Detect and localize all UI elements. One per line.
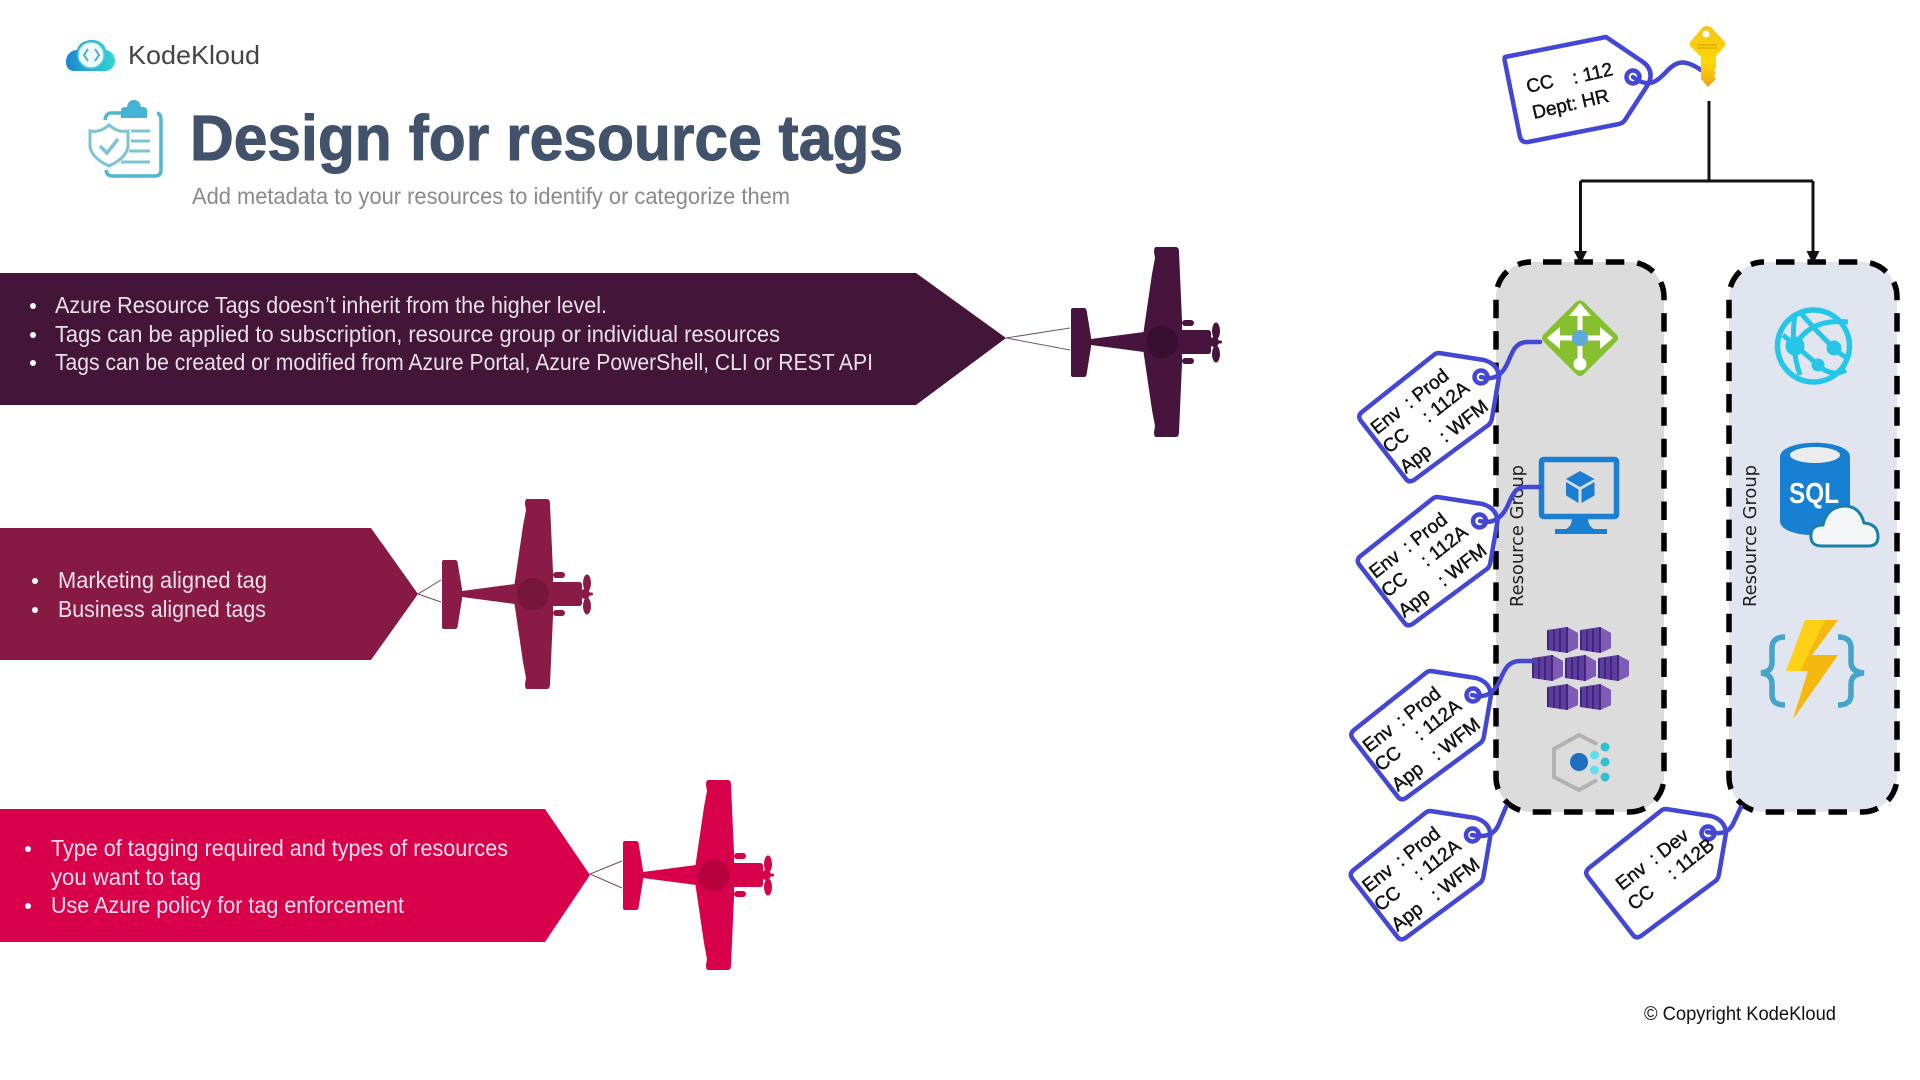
icon: plane 2 towing banner: [418, 499, 593, 689]
tag: load balancer: CC: [1379, 424, 1414, 458]
panel: banner 1 inheritance: [0, 273, 1006, 405]
title: Design for resource tags: [190, 102, 903, 174]
tag: resource group right: : Dev: [1645, 825, 1694, 869]
icon: SQL database: SQL: [1789, 478, 1839, 510]
tag: resource group right: [1586, 807, 1741, 937]
tag: virtual machine: App: [1395, 585, 1434, 622]
icon: hexagon service: [1554, 735, 1610, 790]
banner text: Use Azure policy for tag enforcement: [51, 892, 405, 918]
tag: load balancer: App: [1396, 441, 1436, 478]
arrow: key tag inherits to groups: [1574, 101, 1820, 264]
banner text: [25, 835, 508, 918]
tag: kubernetes: : 112A: [1411, 695, 1466, 745]
panel: banner 3 enforcement: [0, 809, 590, 942]
banner text: Tags can be applied to subscription, resource group or individual resources: [55, 321, 780, 347]
tag: load balancer: [1359, 342, 1540, 481]
tag: kubernetes: [1351, 661, 1532, 799]
banner text: [30, 292, 873, 375]
banner text: Azure Resource Tags doesn’t inherit from the higher level.: [55, 292, 607, 318]
brand name: KodeKloud: [128, 40, 260, 70]
tag: virtual machine: : Prod: [1399, 509, 1452, 557]
icon: function app: [1761, 620, 1864, 719]
tag: kubernetes: : WFM: [1428, 714, 1485, 765]
banner text: Marketing aligned tag: [58, 567, 267, 593]
tag: resource group left: Env: [1359, 860, 1398, 897]
icon: cloud logo: [66, 40, 115, 71]
group label: Resource Group: [1507, 465, 1528, 607]
tag: resource group left: App: [1388, 899, 1427, 936]
panel: banner 2 aligned tags: [0, 528, 418, 660]
icon: load balancer: [1542, 300, 1618, 376]
icon: virtual machine: [1542, 460, 1616, 534]
icon: key: [1690, 26, 1726, 87]
tag: subscription: Dept: HR: [1530, 86, 1611, 124]
logo: KodeKloud: [66, 40, 260, 71]
tag: resource group left: : WFM: [1427, 854, 1484, 905]
tag: load balancer: : WFM: [1436, 396, 1493, 447]
banner text: Type of tagging required and types of resources: [51, 835, 508, 861]
tag: virtual machine: [1358, 487, 1540, 625]
panel: resource group left: [1496, 262, 1664, 812]
tag: load balancer: : 112A: [1419, 377, 1474, 427]
tag: resource group left: [1351, 807, 1506, 939]
tag: load balancer: Env: [1367, 402, 1406, 439]
tag: subscription: CC: [1524, 71, 1556, 98]
tag: resource group left: : 112A: [1410, 835, 1465, 885]
tag: resource group left: CC: [1371, 882, 1405, 916]
tag: virtual machine: CC: [1378, 568, 1412, 602]
icon: clipboard with shield: [90, 100, 161, 176]
tag: load balancer: : Prod: [1400, 365, 1453, 413]
icon: app service globe: [1778, 310, 1850, 382]
tag: resource group right: CC: [1624, 881, 1659, 915]
group container: [1496, 262, 1664, 812]
banner text: [32, 567, 267, 622]
group label: Resource Group: [1740, 465, 1761, 607]
banner arrow shape: [0, 528, 418, 660]
banner text: Tags can be created or modified from Azure Portal, Azure PowerShell, CLI or REST API: [55, 349, 873, 375]
tag: resource group left: : Prod: [1392, 823, 1445, 871]
group container: [1729, 262, 1897, 812]
subtitle: Add metadata to your resources to identify or categorize them: [192, 183, 790, 209]
tag: virtual machine: : WFM: [1434, 540, 1491, 591]
tag: resource group right: : 112B: [1664, 835, 1719, 884]
tag: subscription: : 112: [1570, 59, 1615, 89]
tag: resource group right: Env: [1612, 858, 1651, 895]
icon: plane 3 towing banner: [590, 780, 774, 970]
tag: subscription: [1504, 37, 1701, 142]
banner text: you want to tag: [51, 864, 201, 890]
tag: virtual machine: Env: [1366, 546, 1405, 583]
copyright: © Copyright KodeKloud: [1644, 1004, 1836, 1025]
banner arrow shape: [0, 273, 1006, 405]
tag: kubernetes: CC: [1371, 742, 1406, 776]
panel: resource group right: [1729, 262, 1897, 812]
tag: kubernetes: Env: [1359, 720, 1398, 757]
tag: virtual machine: : 112A: [1417, 521, 1472, 571]
tag: kubernetes: App: [1388, 759, 1428, 796]
icon: SQL database: [1780, 443, 1878, 546]
banner arrow shape: [0, 809, 590, 942]
icon: plane 1 towing banner: [1006, 247, 1222, 437]
icon: kubernetes containers: [1532, 627, 1629, 710]
tag: kubernetes: : Prod: [1392, 683, 1445, 731]
banner text: Business aligned tags: [58, 596, 266, 622]
